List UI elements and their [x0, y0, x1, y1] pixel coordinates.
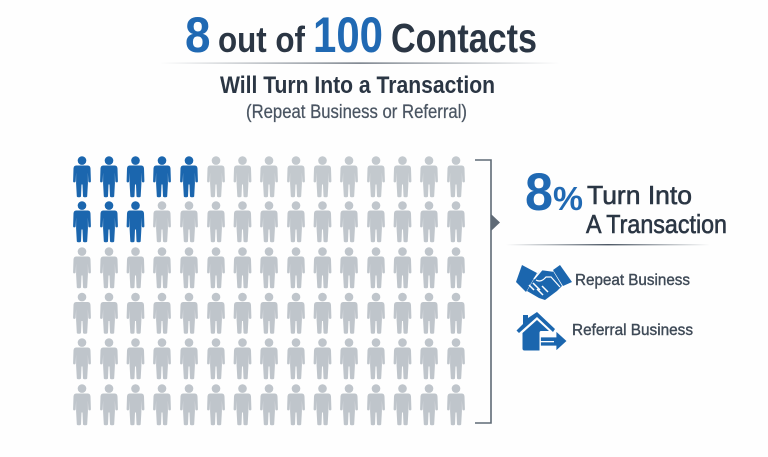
callout divider: [506, 244, 710, 245]
arrow: [491, 214, 500, 231]
row 6 people: [73, 384, 465, 425]
title divider: [160, 62, 560, 64]
row 3 people: [73, 247, 465, 288]
row 2 people: [73, 201, 465, 242]
label: repeat business: Repeat Business: [575, 272, 690, 289]
row 5 people: [73, 338, 465, 379]
subtitle note: (Repeat Business or Referral): [246, 102, 467, 123]
label: referral business: Referral Business: [572, 322, 693, 339]
callout: 8 percent: A Transaction: [586, 209, 727, 239]
bracket: [475, 160, 491, 423]
title: 8: [185, 7, 210, 63]
title: 100: [313, 7, 383, 63]
title: [185, 7, 537, 63]
callout: 8 percent: 8: [525, 163, 553, 222]
row 4 people: [73, 293, 465, 334]
icon: house with arrow: [516, 312, 567, 351]
row 1 people: [73, 156, 465, 197]
callout: 8 percent: [525, 163, 727, 239]
callout: 8 percent: Turn Into: [587, 180, 692, 210]
pictogram: 100 people, 8 highlighted: [73, 156, 465, 425]
title: Contacts: [391, 15, 537, 61]
subtitle: Will Turn Into a Transaction: [220, 72, 495, 99]
title: out of: [218, 19, 306, 60]
icon: handshake: [516, 265, 572, 300]
callout: 8 percent: %: [553, 180, 583, 217]
